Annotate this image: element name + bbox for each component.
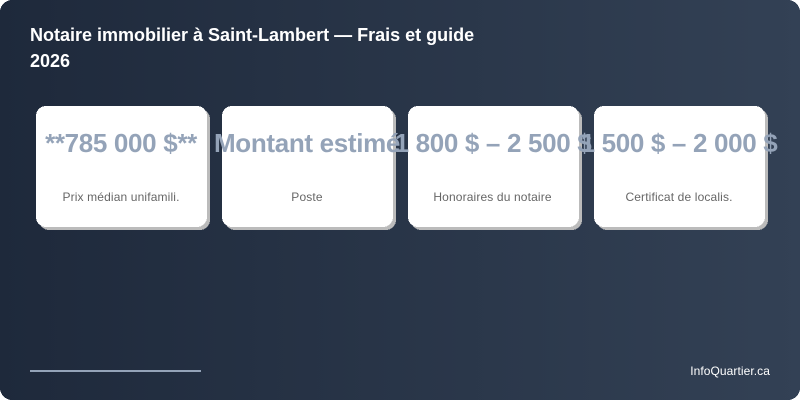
footer rule: [30, 370, 201, 372]
source: InfoQuartier.ca: InfoQuartier.ca: [690, 364, 770, 378]
value: montant estimé: Montant estimé: [214, 128, 400, 158]
label: prix médian: Prix médian unifamili.: [62, 190, 180, 204]
title: 2026: [30, 51, 70, 71]
label: certificat: Certificat de localis.: [625, 190, 733, 204]
value: prix médian: **785 000 $**: [45, 128, 198, 158]
panel: card prix médian: [36, 106, 210, 230]
label: poste: Poste: [291, 190, 323, 204]
value: honoraires: 1 800 $ – 2 500 $: [395, 128, 592, 158]
label: honoraires: Honoraires du notaire: [433, 190, 552, 204]
title: Notaire immobilier à Saint-Lambert — Frais et guide: [30, 25, 474, 45]
value: certificat: 1 500 $ – 2 000 $: [581, 128, 778, 158]
panel: card honoraires: [395, 106, 592, 230]
panel: card poste: [214, 106, 400, 230]
panel: card certificat: [581, 106, 778, 230]
title: [30, 25, 474, 71]
